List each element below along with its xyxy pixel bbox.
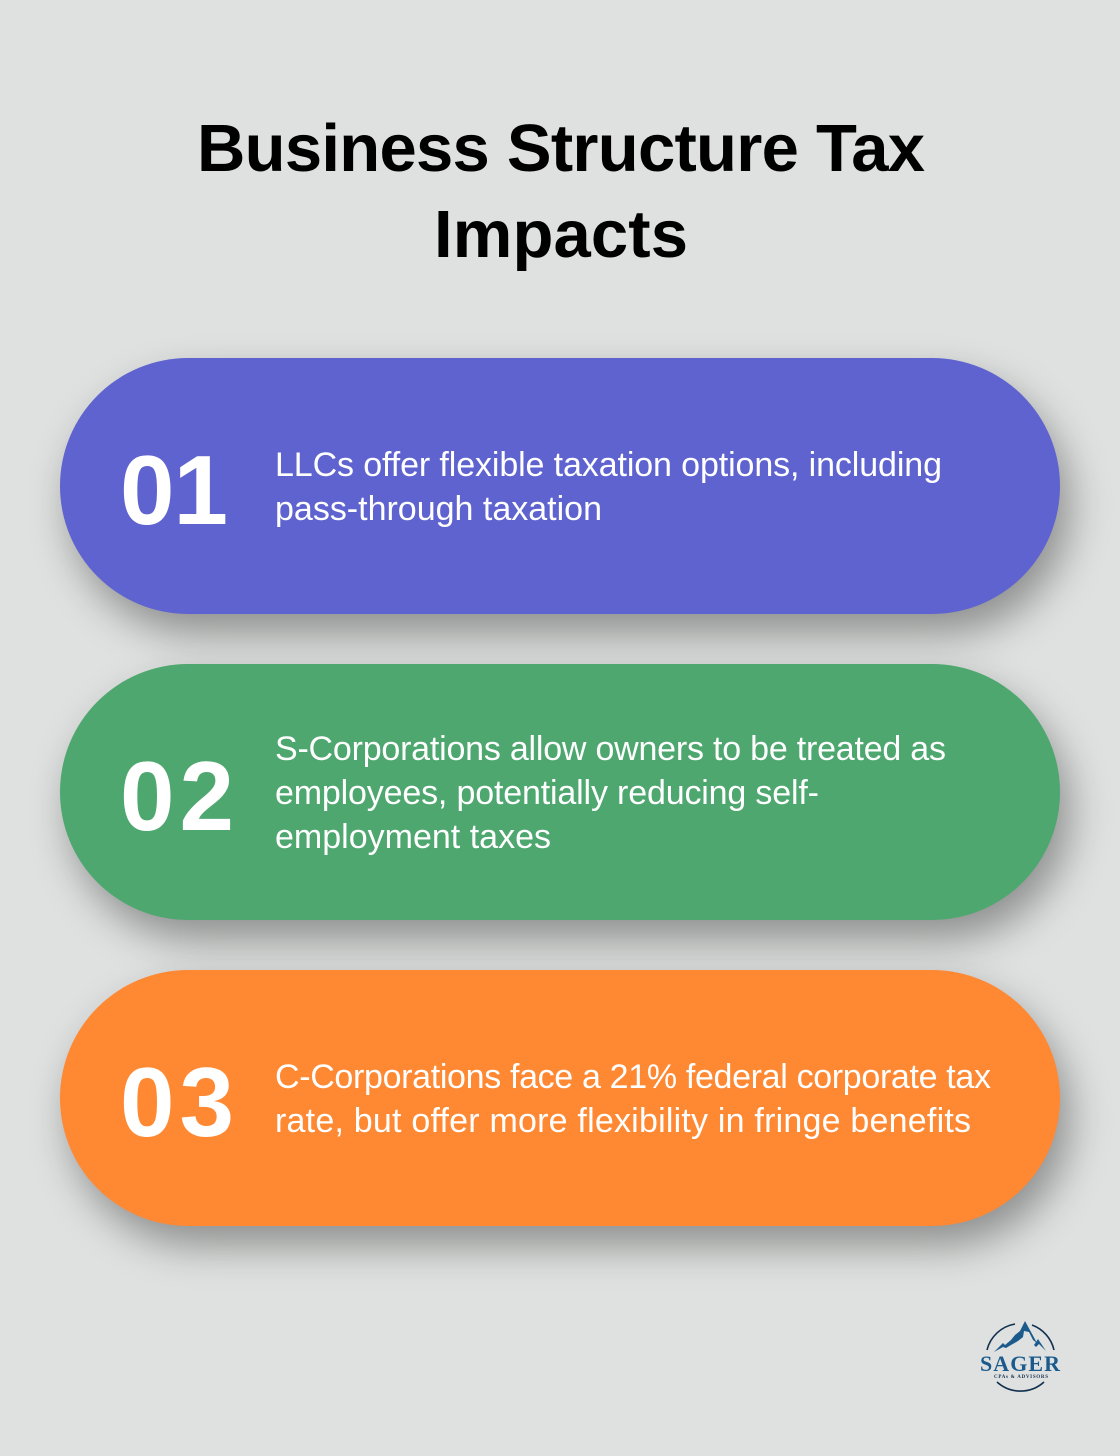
step 02 text: employment taxes (275, 818, 551, 856)
logo wordmark: SAGER (980, 1351, 1061, 1376)
panel: step 02 pill (60, 664, 1060, 920)
step 01 number: 01 (120, 435, 228, 545)
step 02 text: employees, potentially reducing self- (275, 774, 819, 812)
title (197, 111, 925, 272)
step 02 number: 02 (120, 741, 234, 851)
logo mountains (994, 1321, 1037, 1352)
step 01 text: LLCs offer flexible taxation options, including (275, 446, 942, 484)
logo tagline: CPAs & ADVISORS (994, 1375, 1048, 1380)
step 03 text: C-Corporations face a 21% federal corporate tax (275, 1058, 991, 1096)
step 02 text (275, 730, 946, 856)
panel: step 01 pill (60, 358, 1060, 614)
step 03 text (275, 1058, 991, 1140)
step 01 text: pass-through taxation (275, 490, 602, 528)
step 02 text: S-Corporations allow owners to be treated as (275, 730, 946, 768)
panel: step 03 pill (60, 970, 1060, 1226)
logo ring (987, 1324, 1054, 1391)
step 01 text (275, 446, 942, 528)
title: Impacts (434, 197, 688, 272)
step 03 text: rate, but offer more flexibility in fringe benefits (275, 1102, 971, 1140)
title: Business Structure Tax (197, 111, 925, 186)
step 03 number: 03 (120, 1047, 234, 1157)
logo: Sager CPAs & Advisors (980, 1321, 1061, 1391)
